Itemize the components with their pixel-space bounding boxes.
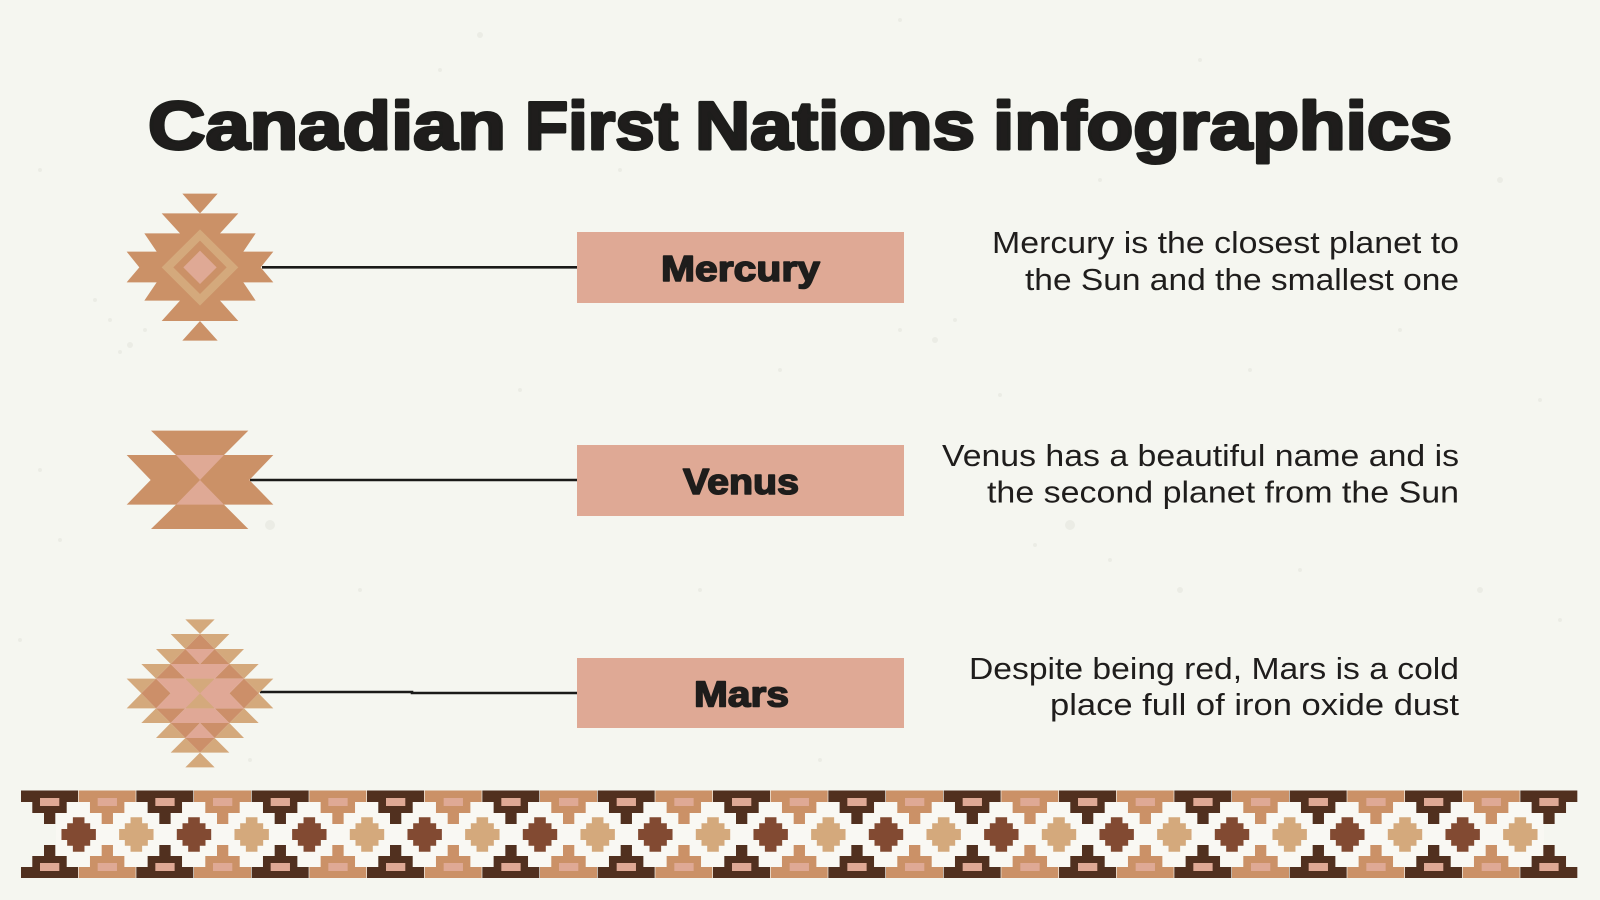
description: Mars — [969, 651, 1459, 722]
row: Venus — [127, 431, 1459, 529]
description: Mars: Despite being red, Mars is a cold — [969, 651, 1459, 686]
description: Venus: Venus has a beautiful name and is — [942, 438, 1459, 473]
description: Mercury — [992, 225, 1459, 297]
icon: Mars geometric emblem — [127, 619, 273, 767]
title: infographics — [993, 88, 1452, 164]
description: Mercury: Mercury is the closest planet to — [992, 225, 1459, 260]
row: Mercury — [127, 194, 1459, 341]
label: Mars: Mars — [694, 674, 789, 714]
description: Mars: place full of iron oxide dust — [1050, 687, 1459, 722]
decorative patterned border — [21, 790, 1577, 878]
row: Mars — [127, 619, 1459, 767]
description: Venus — [942, 438, 1459, 510]
label: Venus: Venus — [683, 461, 799, 502]
connector line: Mercury — [262, 266, 578, 269]
title: Canadian — [148, 88, 506, 164]
description: Mercury: the Sun and the smallest one — [1025, 262, 1459, 297]
connector line: Mars — [260, 692, 578, 693]
label box: Mercury — [577, 232, 904, 303]
title: First — [525, 88, 678, 164]
connector line: Venus — [250, 479, 578, 481]
title: Nations — [695, 88, 975, 164]
description: Venus: the second planet from the Sun — [987, 474, 1459, 510]
label: Mercury: Mercury — [661, 248, 820, 289]
icon: Mercury geometric emblem — [127, 194, 273, 341]
label box: Mars — [577, 658, 904, 728]
label box: Venus — [577, 445, 904, 516]
icon: Venus geometric emblem — [127, 431, 273, 529]
